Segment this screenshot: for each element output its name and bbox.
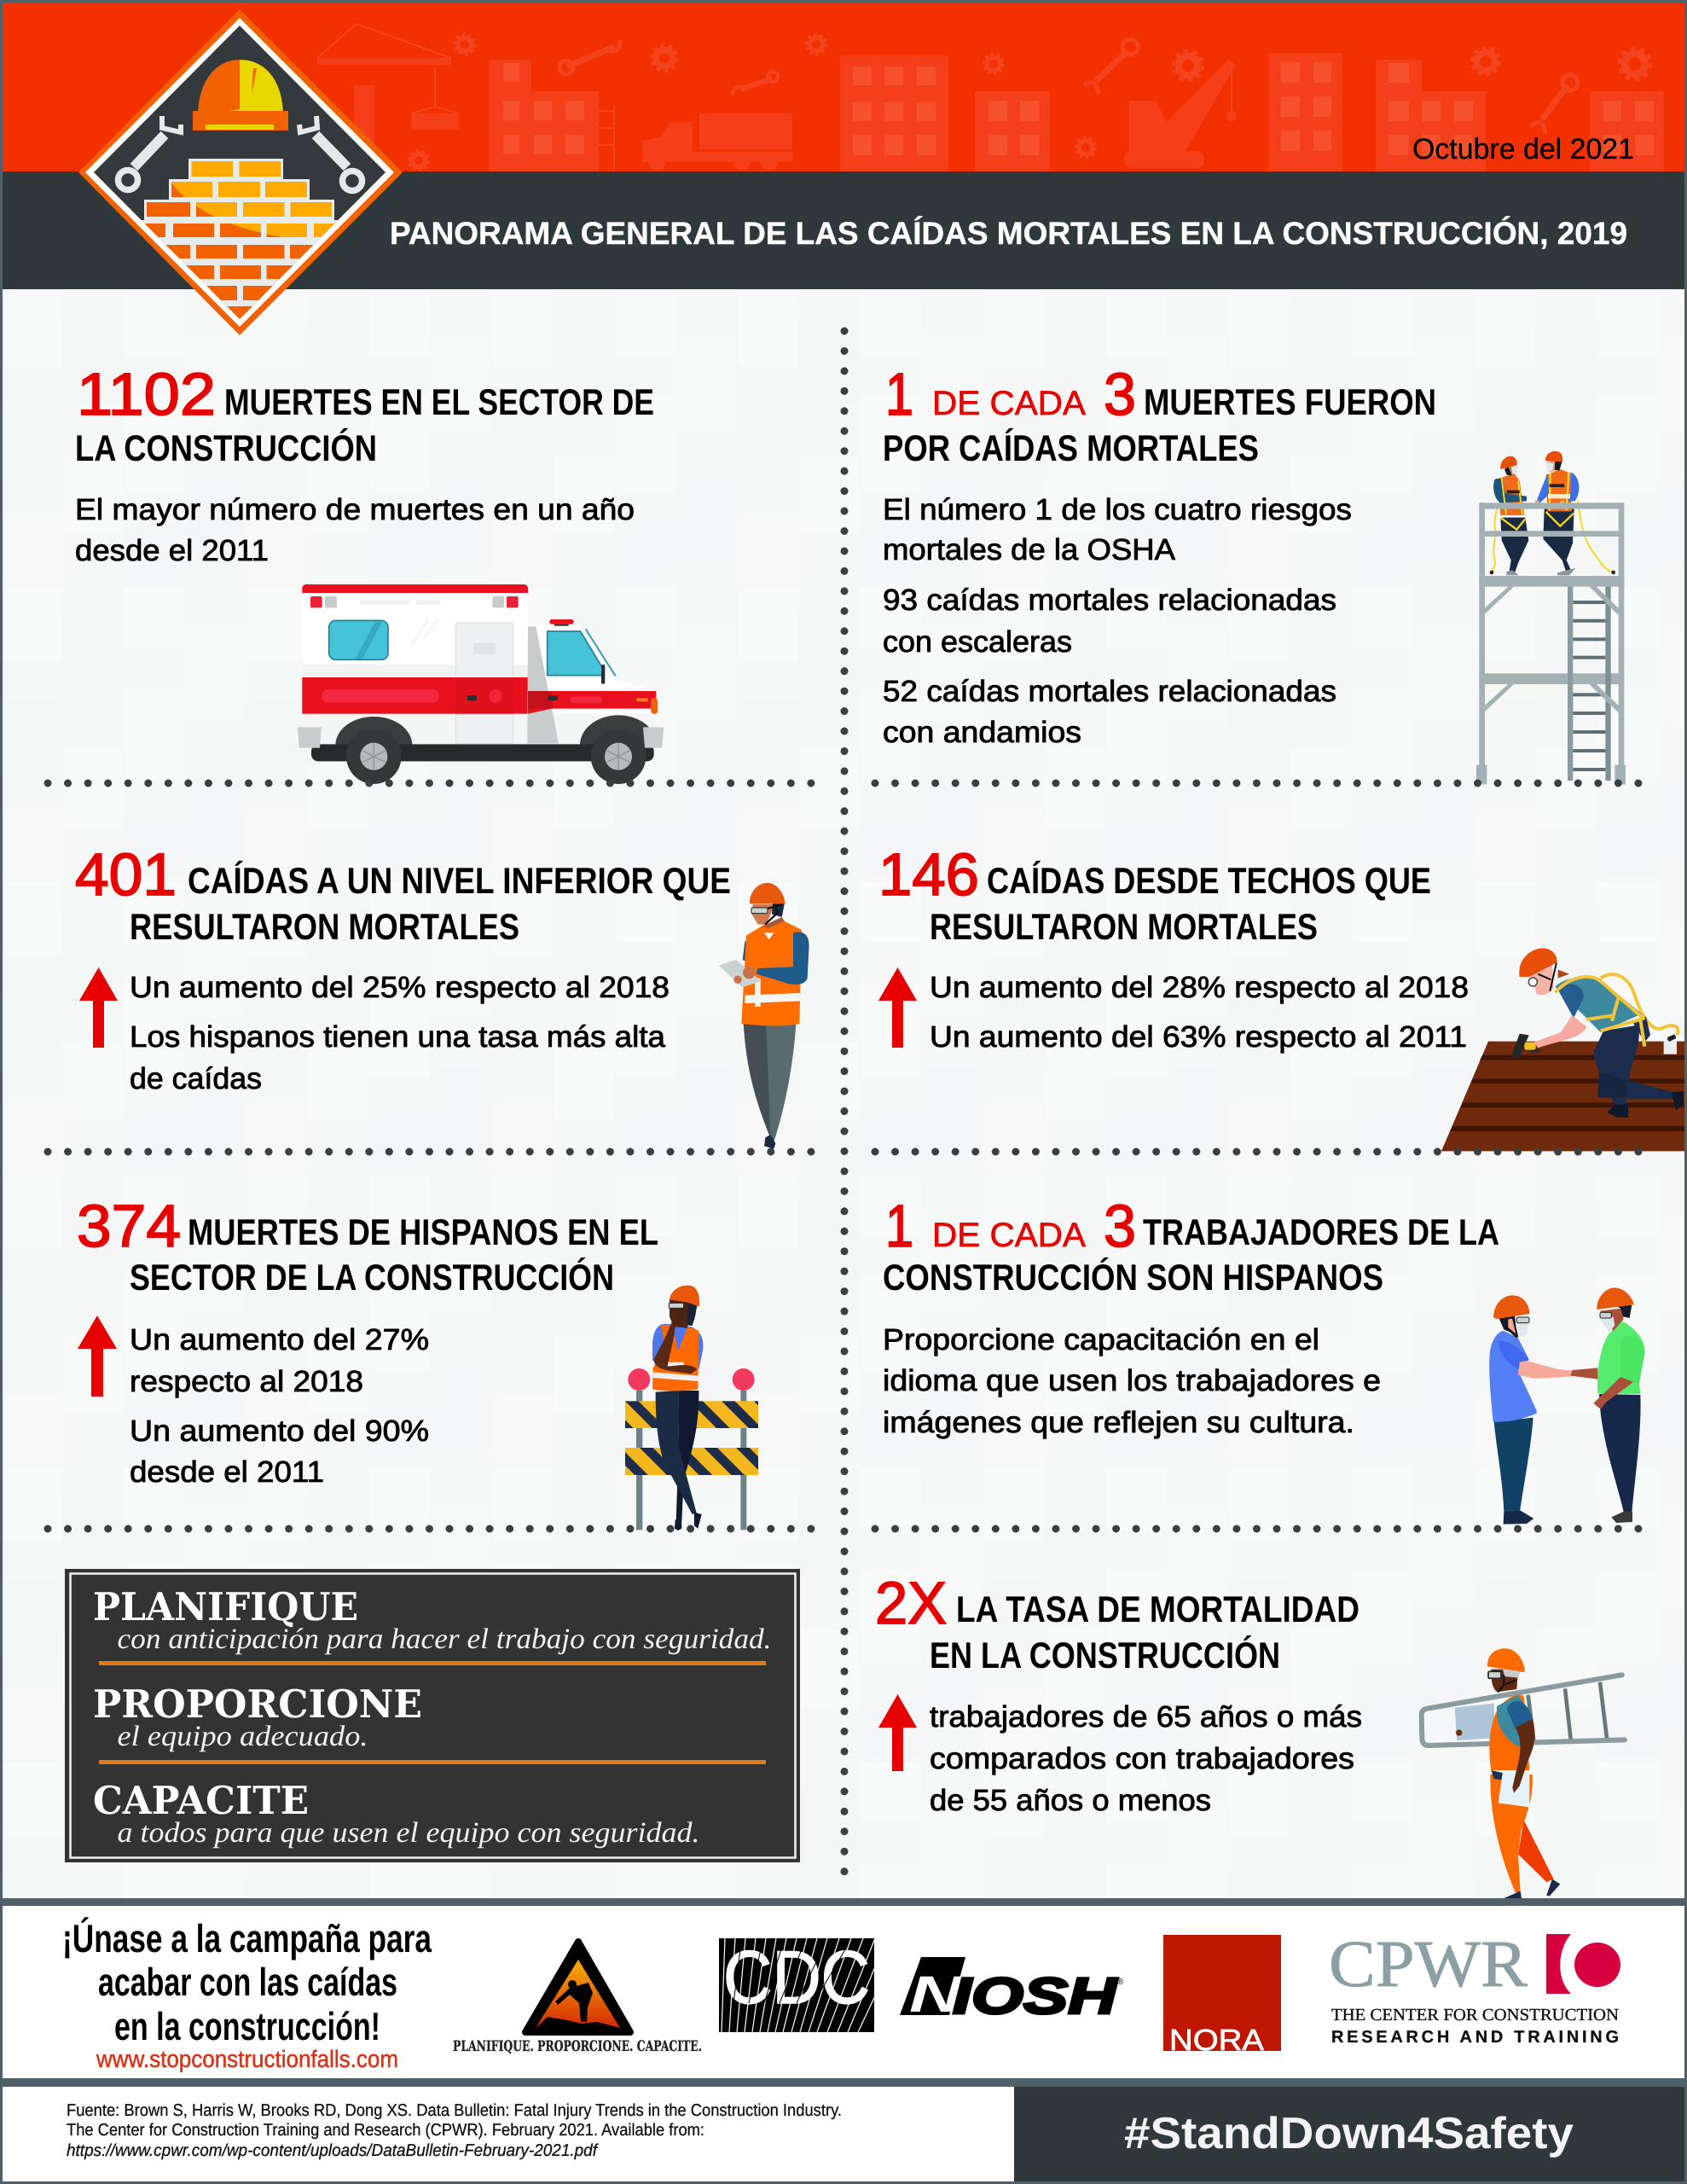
footer source panel bbox=[3, 2087, 1014, 2181]
heading: 146 falls: CAÍDAS DESDE TECHOS QUE bbox=[987, 860, 1431, 902]
body text: Proporcione capacitación en el bbox=[883, 1323, 1319, 1356]
body text: Un aumento del 28% respecto al 2018 bbox=[930, 971, 1469, 1004]
icon: worker carrying ladder bbox=[1422, 1648, 1625, 1898]
heading: 1 in 3 deaths: 3 bbox=[1104, 361, 1136, 427]
heading: 1 in 3 deaths: DE CADA bbox=[932, 385, 1086, 422]
body text bbox=[883, 493, 1352, 749]
arrow: increase bbox=[79, 967, 118, 1048]
heading: 1 in 3 workers: DE CADA bbox=[932, 1217, 1086, 1254]
text: train detail: a todos para que usen el equipo con seguridad. bbox=[118, 1817, 700, 1849]
panel: 374 Hispanic deaths bbox=[77, 1193, 758, 1531]
arrow: increase bbox=[878, 967, 917, 1048]
body text: desde el 2011 bbox=[130, 1455, 324, 1489]
icon: worker at road barrier bbox=[625, 1286, 758, 1531]
heading: 1102 deaths: 1102 bbox=[77, 361, 216, 427]
body text bbox=[930, 971, 1469, 1054]
heading: 1 in 3 deaths: 1 bbox=[885, 361, 913, 427]
icon: worker with tablet bbox=[719, 883, 809, 1149]
body text: Un aumento del 63% respecto al 2011 bbox=[930, 1020, 1467, 1054]
campaign call to action: www.stopconstructionfalls.com bbox=[96, 2046, 398, 2072]
logo: NIOSH: ® bbox=[1117, 1978, 1124, 1987]
body text bbox=[75, 493, 635, 567]
title: PANORAMA GENERAL DE LAS CAÍDAS MORTALES EN LA CONSTRUCCIÓN, 2019 bbox=[390, 216, 1627, 251]
dotted dividers bbox=[48, 331, 1642, 1874]
body text: 52 caídas mortales relacionadas bbox=[883, 675, 1336, 708]
logo: CPWR: THE CENTER FOR CONSTRUCTION bbox=[1331, 2006, 1619, 2024]
panel: 1 in 3 deaths from falls bbox=[883, 361, 1626, 784]
heading: 1 in 3 deaths bbox=[883, 361, 1436, 469]
body text: El mayor número de muertes en un año bbox=[75, 493, 635, 526]
heading: 146 falls: RESULTARON MORTALES bbox=[930, 907, 1318, 948]
panel: 146 falls from roofs bbox=[878, 841, 1684, 1151]
heading: 401 falls: 401 bbox=[75, 841, 177, 908]
heading: 1102 deaths: LA CONSTRUCCIÓN bbox=[75, 427, 377, 469]
body text: Los hispanos tienen una tasa más alta bbox=[130, 1020, 666, 1054]
body text: idioma que usen los trabajadores e bbox=[883, 1364, 1381, 1397]
header red band with construction skyline bbox=[0, 3, 1687, 171]
heading: 374 deaths bbox=[77, 1193, 658, 1298]
icon: workers on scaffold bbox=[1476, 451, 1626, 784]
heading: 1102 deaths bbox=[75, 361, 654, 469]
partner strip background bbox=[0, 1906, 1687, 2078]
panel: 1102 deaths bbox=[75, 361, 664, 784]
body text: con andamios bbox=[883, 716, 1081, 749]
header dark title band bbox=[0, 171, 1687, 289]
heading: 2X rate: EN LA CONSTRUCCIÓN bbox=[930, 1635, 1280, 1676]
body text bbox=[130, 1323, 429, 1489]
heading: 374 deaths: MUERTES DE HISPANOS EN EL bbox=[188, 1212, 658, 1253]
heading: 374 deaths: SECTOR DE LA CONSTRUCCIÓN bbox=[130, 1257, 614, 1298]
logo: NORA bbox=[1163, 1935, 1281, 2057]
footer hashtag panel bbox=[1014, 2087, 1684, 2181]
body text: imágenes que reflejen su cultura. bbox=[883, 1406, 1354, 1439]
logo: NIOSH bbox=[900, 1957, 1124, 2024]
page background tiles bbox=[0, 289, 1687, 1902]
panel: 401 falls to lower level bbox=[75, 841, 809, 1149]
heading: 2X rate: 2X bbox=[875, 1570, 947, 1636]
heading: 401 falls: RESULTARON MORTALES bbox=[130, 907, 519, 948]
heading: 2X rate: LA TASA DE MORTALIDAD bbox=[956, 1589, 1359, 1630]
body text: desde el 2011 bbox=[75, 534, 269, 567]
footer source panel: Fuente: Brown S, Harris W, Brooks RD, Dong XS. Data Bulletin: Fatal Injury Trends in the Construction Industry. bbox=[67, 2101, 842, 2120]
body text bbox=[130, 971, 670, 1095]
body text: respecto al 2018 bbox=[130, 1365, 363, 1398]
panel: 1 in 3 workers Hispanic bbox=[883, 1193, 1644, 1525]
logo: NORA: NORA bbox=[1169, 2024, 1265, 2057]
logo: CDC: CDC bbox=[723, 1935, 870, 2019]
logo: NIOSH: IOSH bbox=[953, 1967, 1118, 2024]
panel: plan provide train box bbox=[65, 1569, 800, 1862]
panel: 2X fatality rate bbox=[875, 1570, 1625, 1898]
campaign call to action: ¡Únase a la campaña para bbox=[62, 1916, 432, 1960]
body text: comparados con trabajadores bbox=[930, 1742, 1354, 1775]
arrow: increase bbox=[78, 1316, 117, 1397]
campaign call to action: acabar con las caídas bbox=[98, 1960, 397, 2004]
campaign call to action: en la construcción! bbox=[114, 2004, 380, 2048]
logo: CPWR: RESEARCH AND TRAINING bbox=[1331, 2028, 1619, 2047]
logo: CPWR: CPWR bbox=[1329, 1926, 1528, 2001]
body text: mortales de la OSHA bbox=[883, 533, 1176, 566]
heading: 1 in 3 workers bbox=[883, 1193, 1499, 1298]
heading: 374 deaths: 374 bbox=[77, 1193, 181, 1259]
logo: stop construction falls triangle bbox=[453, 1942, 702, 2055]
heading: 401 falls bbox=[75, 841, 731, 948]
heading: 146 falls bbox=[878, 841, 1431, 948]
date label: Octubre del 2021 bbox=[1412, 133, 1634, 166]
heading: 1 in 3 workers: 3 bbox=[1104, 1193, 1136, 1259]
heading: 1 in 3 workers: TRABAJADORES DE LA bbox=[1143, 1212, 1499, 1253]
heading: 2X rate bbox=[875, 1570, 1359, 1676]
body text: de caídas bbox=[130, 1062, 262, 1095]
body text: El número 1 de los cuatro riesgos bbox=[883, 493, 1352, 526]
heading: provide: PROPORCIONE bbox=[93, 1682, 422, 1727]
heading: 146 falls: 146 bbox=[878, 841, 979, 908]
footer hashtag panel: #StandDown4Safety bbox=[1124, 2109, 1574, 2158]
body text: de 55 años o menos bbox=[930, 1784, 1211, 1817]
icon: ambulance bbox=[298, 584, 664, 784]
icon: two workers shaking hands bbox=[1489, 1287, 1644, 1525]
body text: 93 caídas mortales relacionadas bbox=[883, 584, 1336, 617]
heading: plan: PLANIFIQUE bbox=[93, 1584, 358, 1629]
text: provide detail: el equipo adecuado. bbox=[118, 1721, 368, 1752]
heading: 1102 deaths: MUERTES EN EL SECTOR DE bbox=[224, 382, 654, 423]
heading: 1 in 3 workers: 1 bbox=[885, 1193, 913, 1259]
logo: diamond badge with helmet, wrenches and bricks bbox=[78, 9, 403, 335]
footer source panel: The Center for Construction Training and Research (CPWR). February 2021. Available from: bbox=[67, 2121, 704, 2140]
text: plan detail: con anticipación para hacer el trabajo con seguridad. bbox=[118, 1623, 771, 1655]
body text bbox=[883, 1323, 1381, 1439]
body text bbox=[930, 1700, 1362, 1817]
body text: Un aumento del 27% bbox=[130, 1323, 429, 1356]
logo: NIOSH: N bbox=[909, 1966, 964, 2023]
arrow: increase bbox=[878, 1694, 917, 1771]
icon: roofer with harness bbox=[1441, 949, 1684, 1151]
heading: 401 falls: CAÍDAS A UN NIVEL INFERIOR QUE bbox=[188, 860, 731, 902]
body text: con escaleras bbox=[883, 625, 1072, 659]
heading: 1 in 3 deaths: POR CAÍDAS MORTALES bbox=[883, 427, 1259, 469]
body text: Un aumento del 25% respecto al 2018 bbox=[130, 971, 670, 1004]
heading: 1 in 3 deaths: MUERTES FUERON bbox=[1144, 382, 1436, 423]
body text: Un aumento del 90% bbox=[130, 1414, 429, 1448]
heading: 1 in 3 workers: CONSTRUCCIÓN SON HISPANOS bbox=[883, 1257, 1383, 1298]
body text: trabajadores de 65 años o más bbox=[930, 1700, 1362, 1734]
campaign call to action bbox=[62, 1916, 432, 2072]
logo: CPWR bbox=[1329, 1926, 1620, 2047]
footer source panel: https://www.cpwr.com/wp-content/uploads/DataBulletin-February-2021.pdf bbox=[67, 2141, 599, 2160]
logo: stop construction falls triangle: PLANIFIQUE. PROPORCIONE. CAPACITE. bbox=[453, 2038, 702, 2055]
heading: train: CAPACITE bbox=[93, 1778, 309, 1823]
